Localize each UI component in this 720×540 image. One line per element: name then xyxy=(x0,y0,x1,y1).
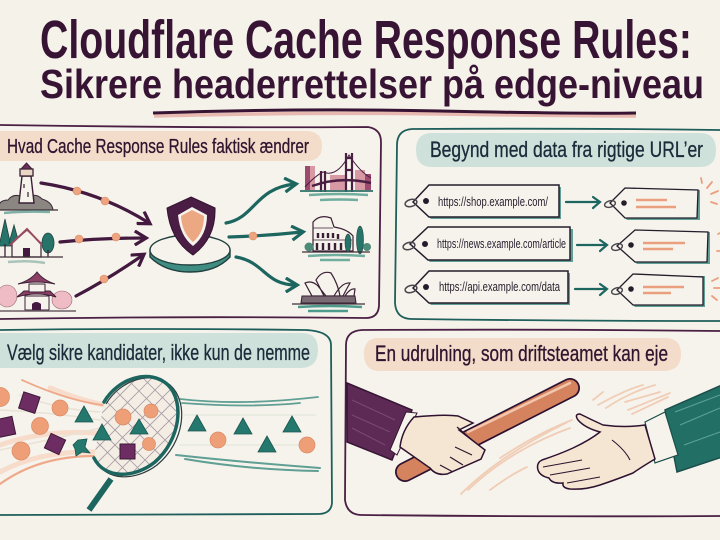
panel: safe candidates xyxy=(0,329,332,515)
result tag row 2 xyxy=(611,230,710,264)
heading pill xyxy=(0,333,318,368)
icon: colosseum xyxy=(302,217,371,260)
panel: real URLs xyxy=(395,129,720,321)
title xyxy=(40,10,704,116)
icon: pagoda xyxy=(0,272,76,311)
icon: suspension bridge xyxy=(300,153,373,200)
icon: shield on disk xyxy=(150,197,230,272)
panel: baton handoff xyxy=(345,330,720,516)
heading pill xyxy=(364,338,681,371)
candidates: squares xyxy=(0,392,135,459)
icon: lighthouse xyxy=(0,163,58,213)
sparkle marks xyxy=(701,178,720,300)
incoming stream xyxy=(0,380,110,484)
candidates: circles xyxy=(0,388,315,460)
baton xyxy=(405,383,570,472)
row arrows xyxy=(566,197,607,295)
left hand xyxy=(400,415,485,474)
url tag row 3: https://api.example.com/data xyxy=(439,279,561,294)
url tag row 2 xyxy=(402,227,573,262)
url tag row 3 xyxy=(404,271,570,305)
title underline xyxy=(153,110,636,116)
heading pill: Hvad Cache Response Rules faktisk ændrer xyxy=(7,136,309,158)
left sleeve xyxy=(347,383,417,460)
racket xyxy=(86,374,182,512)
arrow checkpoints xyxy=(73,187,120,283)
arrows into the shield xyxy=(41,183,149,296)
heading pill xyxy=(0,131,322,161)
icon: farmhouse xyxy=(0,219,63,263)
result tag row 1 xyxy=(604,188,700,220)
heading pill: Vælg sikre kandidater, ikke kun de nemme xyxy=(7,340,310,365)
panel: what the rules change xyxy=(0,125,381,319)
outgoing stream xyxy=(176,397,320,471)
heading pill xyxy=(416,133,716,167)
candidates: triangles xyxy=(73,406,301,456)
url tag row 1: https://shop.example.com/ xyxy=(438,194,548,209)
right hand xyxy=(538,414,655,489)
right sleeve xyxy=(645,385,720,472)
arrows out of the shield xyxy=(226,184,302,285)
output checkpoint xyxy=(249,232,257,240)
motion strokes xyxy=(461,385,670,494)
url tag row 2: https://news.example.com/article xyxy=(437,236,566,251)
url tag row 1 xyxy=(404,185,561,219)
result tag row 3 xyxy=(611,274,705,307)
icon: opera house xyxy=(292,272,365,311)
